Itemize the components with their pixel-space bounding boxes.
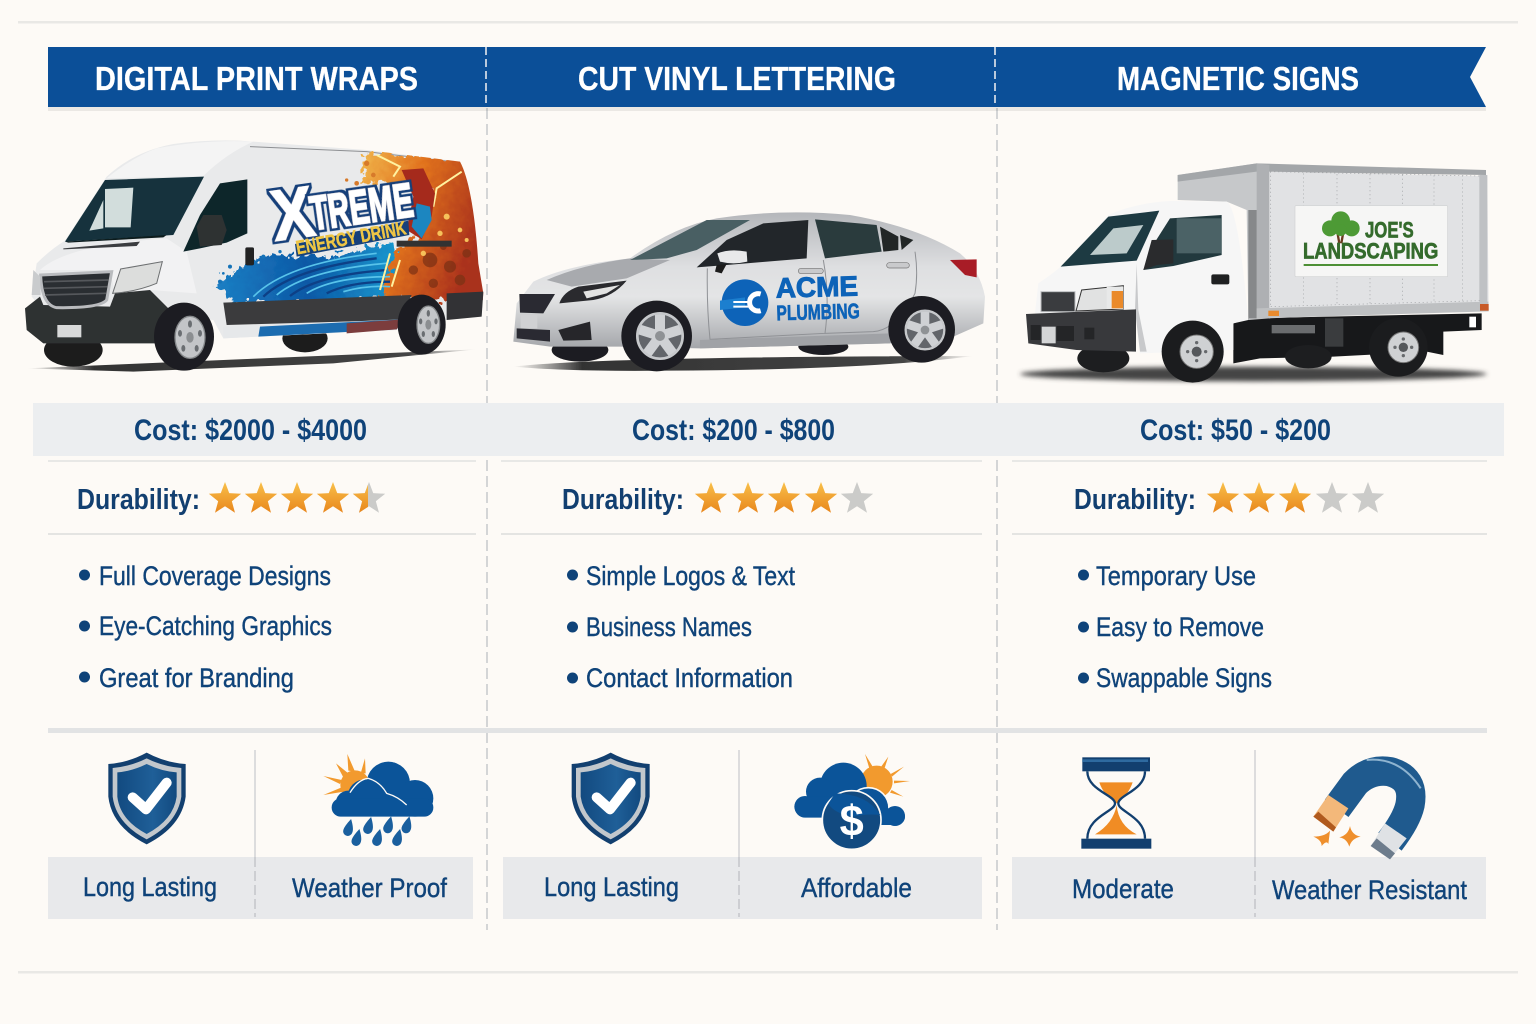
illustration: box truck with magnetic sign xyxy=(1020,163,1489,383)
car logo: ACME xyxy=(775,271,858,304)
icon: weather proof xyxy=(323,754,433,847)
panel: cut vinyl lettering xyxy=(486,212,996,919)
durability rating: Durability: xyxy=(562,484,684,516)
thick row divider xyxy=(48,728,1487,733)
durability rating xyxy=(1074,482,1384,516)
wheels xyxy=(154,303,214,371)
van logo: X xyxy=(266,171,319,257)
panel: magnetic signs xyxy=(996,163,1504,919)
header banner xyxy=(48,47,1486,111)
cost band: Cost: $2000 - $4000 xyxy=(134,414,367,447)
icon: affordable: $ xyxy=(840,798,864,846)
feature list: Great for Branding xyxy=(99,663,294,693)
feature list xyxy=(1078,561,1272,693)
wheels xyxy=(1162,321,1224,383)
icon: affordable xyxy=(794,754,910,849)
cost band: Cost: $200 - $800 xyxy=(632,414,835,447)
cab xyxy=(1035,201,1248,353)
car logo xyxy=(720,271,860,326)
icon: hourglass xyxy=(1081,757,1151,849)
heading: magnetic signs: MAGNETIC SIGNS xyxy=(1117,60,1359,97)
panel: digital print wraps xyxy=(25,140,487,919)
lower body xyxy=(25,290,170,343)
column dividers xyxy=(487,108,997,930)
cost band: Cost: $50 - $200 xyxy=(1140,414,1331,447)
durability rating xyxy=(77,482,385,516)
feature list: Simple Logos & Text xyxy=(586,561,795,591)
durability rating xyxy=(562,482,873,516)
car logo: PLUMBING xyxy=(776,299,860,325)
van logo: ENERGY DRINK xyxy=(294,218,408,259)
icon: shield xyxy=(108,753,186,844)
feature list: Easy to Remove xyxy=(1096,612,1264,642)
cost band xyxy=(486,403,996,456)
van logo xyxy=(266,171,417,259)
wheels xyxy=(621,301,692,371)
feature list: Temporary Use xyxy=(1096,561,1256,591)
label: weather resistant: Weather Resistant xyxy=(1272,875,1467,905)
magnetic sign: JOE'S xyxy=(1365,217,1414,242)
feature list xyxy=(79,561,332,693)
illustration: sedan with vinyl lettering xyxy=(513,212,985,371)
label: weather proof: Weather Proof xyxy=(292,873,447,903)
label: long lasting: Long Lasting xyxy=(83,872,217,902)
feature list: Contact Information xyxy=(586,663,793,693)
heading: digital print wraps: DIGITAL PRINT WRAPS xyxy=(95,60,418,97)
durability rating: Durability: xyxy=(77,484,200,516)
feature list xyxy=(567,561,795,693)
magnetic sign xyxy=(1295,206,1448,277)
van logo: TREME xyxy=(307,173,417,241)
feature list: Business Names xyxy=(586,612,752,642)
grille xyxy=(41,272,112,308)
label: affordable: Affordable xyxy=(801,873,912,903)
feature list: Eye-Catching Graphics xyxy=(99,611,332,641)
label: moderate: Moderate xyxy=(1072,874,1174,904)
icon: shield xyxy=(572,753,650,844)
label: long lasting: Long Lasting xyxy=(544,872,679,902)
feature list: Full Coverage Designs xyxy=(99,561,331,591)
illustration: wrapped van xyxy=(25,140,487,372)
feature list: Swappable Signs xyxy=(1096,663,1272,693)
durability rating: Durability: xyxy=(1074,484,1196,516)
icon: magnet xyxy=(1313,760,1421,859)
cost band xyxy=(996,403,1504,456)
magnetic sign: LANDSCAPING xyxy=(1303,238,1438,263)
cost band xyxy=(33,403,486,456)
heading: cut vinyl lettering: CUT VINYL LETTERING xyxy=(578,60,896,97)
cargo box xyxy=(1178,163,1270,320)
